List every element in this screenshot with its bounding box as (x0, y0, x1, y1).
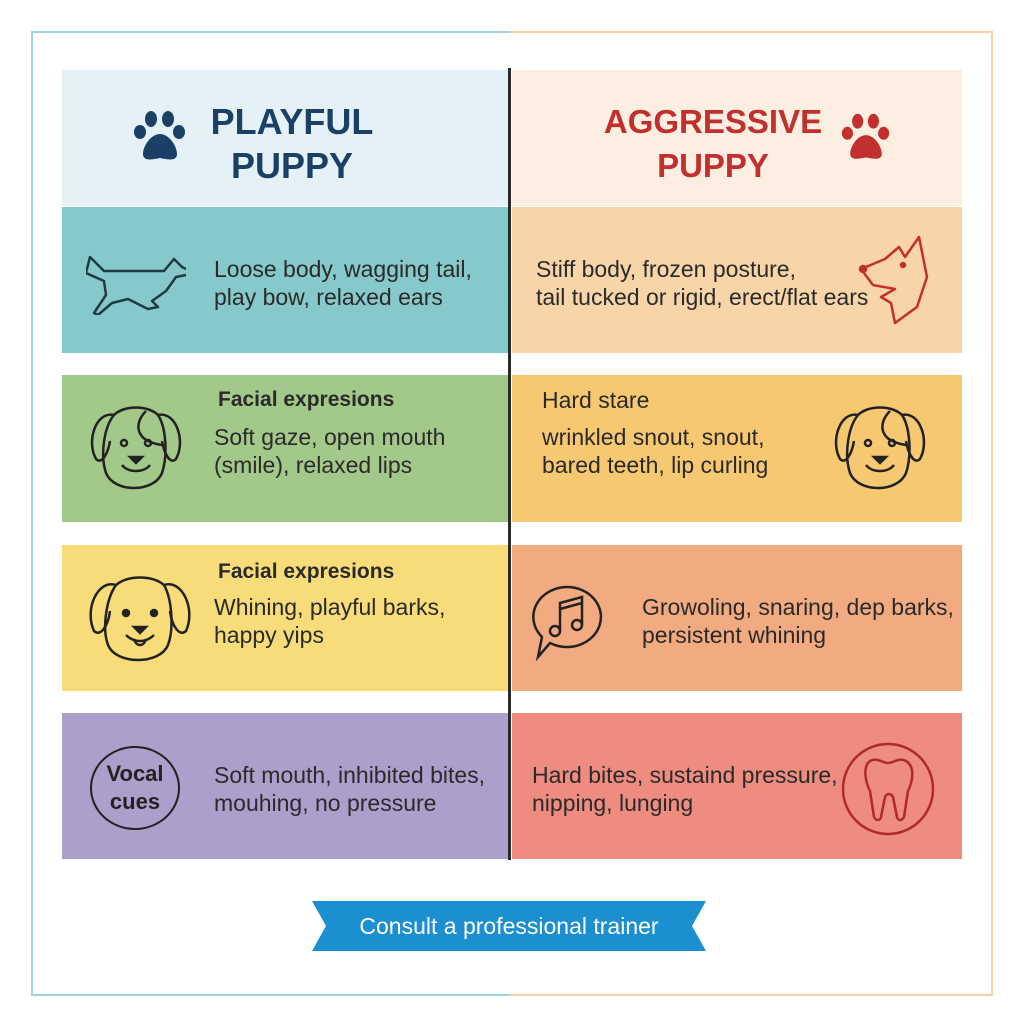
title: aggressive puppy: PUPPY (657, 147, 769, 184)
text: Soft mouth, inhibited bites, (214, 762, 485, 788)
text: persistent whining (642, 622, 826, 648)
text (536, 256, 868, 310)
title: aggressive puppy (604, 103, 822, 184)
text: (smile), relaxed lips (214, 452, 412, 478)
text: nipping, lunging (532, 790, 693, 816)
row3 left: vocal (62, 545, 508, 691)
text: Stiff body, frozen posture, (536, 256, 796, 282)
row1 right: body (512, 207, 962, 353)
text: bared teeth, lip curling (542, 452, 768, 478)
icon: dog face (90, 406, 182, 490)
title: playful puppy: PLAYFUL (211, 101, 373, 142)
icon: vocal cues circle: Vocal (106, 761, 164, 786)
heading: Facial expresions (218, 388, 394, 411)
heading: Facial expresions (218, 560, 394, 583)
icon: vocal cues circle: cues (110, 789, 160, 814)
row1 left: body (62, 207, 508, 353)
text: happy yips (214, 622, 324, 648)
text: play bow, relaxed ears (214, 284, 443, 310)
title: aggressive puppy: AGGRESSIVE (604, 103, 822, 140)
text (214, 594, 445, 648)
outer frame right (510, 31, 993, 996)
row2 left: facial (62, 375, 508, 522)
row4 left: bites (62, 713, 508, 859)
header: aggressive (512, 70, 962, 206)
banner: consult trainer: Consult a professional trainer (359, 913, 659, 939)
icon: running dog (86, 256, 186, 315)
icon: dog face (834, 406, 926, 490)
icon: paw red (842, 114, 890, 159)
row3 right: vocal (512, 545, 962, 691)
text (542, 424, 768, 478)
text: Loose body, wagging tail, (214, 256, 472, 282)
icon: tooth (842, 742, 934, 836)
icon: angry dog (858, 236, 928, 324)
text: wrinkled snout, snout, (542, 424, 764, 450)
heading: Hard stare (542, 387, 649, 413)
text: Whining, playful barks, (214, 594, 445, 620)
title: playful puppy: PUPPY (231, 145, 353, 186)
text (214, 424, 445, 478)
text: mouhing, no pressure (214, 790, 436, 816)
icon: vocal cues circle (90, 746, 180, 830)
outer frame left (31, 31, 512, 996)
center divider (508, 68, 511, 860)
text (532, 762, 838, 816)
banner: consult trainer (312, 901, 706, 951)
icon: music speech bubble (532, 586, 602, 661)
text (214, 762, 485, 816)
row4 right: bites (512, 713, 962, 859)
text: Hard bites, sustaind pressure, (532, 762, 838, 788)
text (214, 256, 472, 310)
icon: puppy face (89, 576, 191, 662)
text: Growoling, snaring, dep barks, (642, 594, 954, 620)
text (642, 594, 954, 648)
title: playful puppy (211, 101, 373, 186)
text: Soft gaze, open mouth (214, 424, 445, 450)
header: playful (62, 70, 508, 206)
icon: paw blue (134, 111, 185, 160)
text: tail tucked or rigid, erect/flat ears (536, 284, 868, 310)
row2 right: facial (512, 375, 962, 522)
